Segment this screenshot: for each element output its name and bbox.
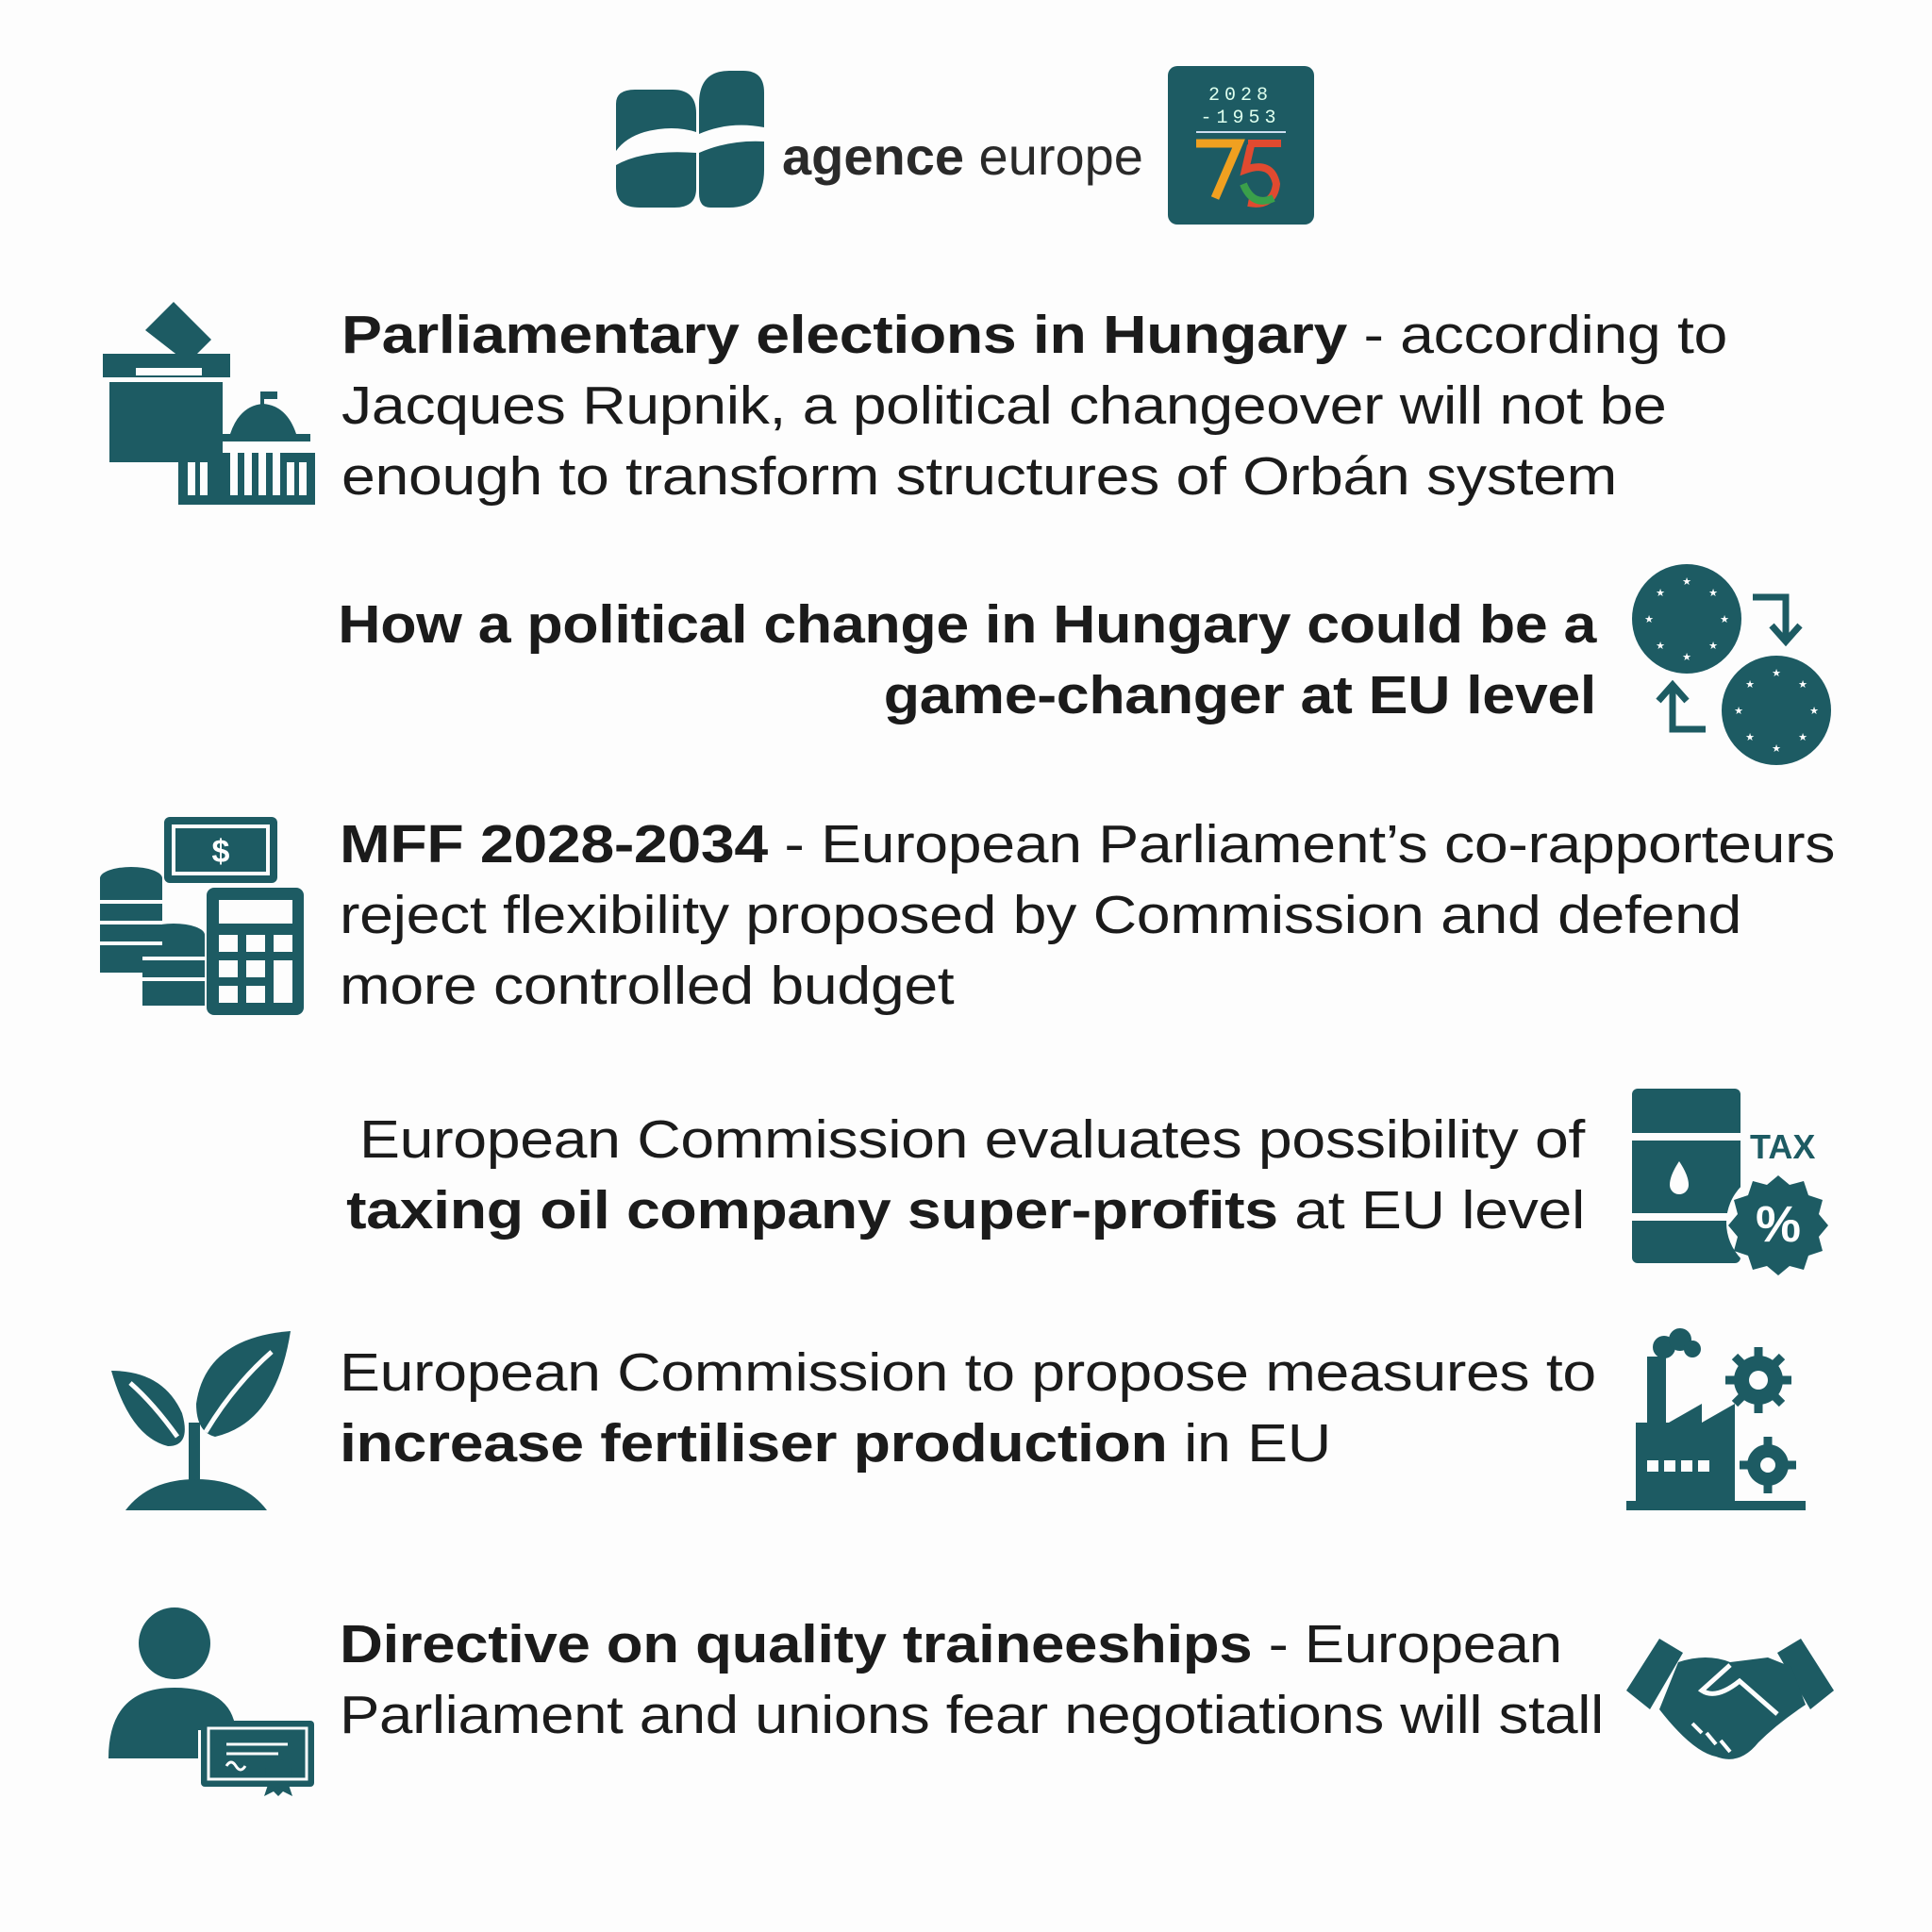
icon: EU flags exchange: ★ xyxy=(1708,587,1718,599)
icon: EU flags exchange: ★ xyxy=(1656,587,1665,599)
row 5 text: European Commission to propose measures to xyxy=(340,1342,1596,1403)
row 1 text xyxy=(341,305,1727,507)
wordmark: agence europe xyxy=(782,126,1143,186)
logo mark xyxy=(616,71,764,208)
icon: EU flags exchange: ★ xyxy=(1772,667,1781,679)
row 1 text: Jacques Rupnik, a political changeover will not be xyxy=(341,375,1666,436)
icon: oil barrel tax: TAX xyxy=(1750,1127,1815,1166)
row 4 text: taxing oil company super-profits at EU level xyxy=(346,1180,1585,1241)
icon: plant sprout xyxy=(111,1331,291,1510)
icon: ballot box and parliament xyxy=(103,302,315,505)
row 1 text: Parliamentary elections in Hungary - according to xyxy=(341,305,1727,365)
row 3 text: more controlled budget xyxy=(340,956,954,1016)
icon: EU flags exchange: ★ xyxy=(1682,651,1691,663)
icon: EU flags exchange: ★ xyxy=(1798,731,1807,743)
icon: EU flags exchange: ★ xyxy=(1720,613,1729,625)
row 4 text: European Commission evaluates possibility of xyxy=(359,1109,1585,1170)
icon: EU flags exchange: ★ xyxy=(1809,705,1819,717)
row 3 text xyxy=(340,814,1835,1016)
icon: handshake xyxy=(1626,1639,1834,1759)
row 3 text: reject flexibility proposed by Commission and defend xyxy=(340,885,1741,945)
badge 75 years: 2028 xyxy=(1208,85,1273,107)
icon: coins and calculator: $ xyxy=(212,834,230,870)
icon: oil barrel tax xyxy=(1632,1089,1828,1275)
row 2 text: How a political change in Hungary could be a xyxy=(338,594,1596,655)
row 6 text: Parliament and unions fear negotiations will stall xyxy=(340,1685,1604,1745)
icon: factory with gears xyxy=(1626,1328,1806,1510)
icon: EU flags exchange: ★ xyxy=(1745,678,1755,691)
badge 75 years: -1953 xyxy=(1200,108,1281,129)
icon: EU flags exchange: ★ xyxy=(1734,705,1743,717)
row 6 text: Directive on quality traineeships - European xyxy=(340,1614,1562,1674)
icon: EU flags exchange xyxy=(1632,564,1831,765)
row 2 text xyxy=(338,594,1597,725)
row 4 text xyxy=(346,1109,1585,1241)
icon: EU flags exchange: ★ xyxy=(1798,678,1807,691)
row 1 text: enough to transform structures of Orbán system xyxy=(341,446,1617,507)
row 3 text: MFF 2028-2034 - European Parliament’s co-rapporteurs xyxy=(340,814,1835,874)
badge 75 years xyxy=(1168,66,1314,225)
icon: EU flags exchange: ★ xyxy=(1656,640,1665,652)
row 6 text xyxy=(340,1614,1604,1745)
row 5 text: increase fertiliser production in EU xyxy=(340,1413,1331,1474)
icon: EU flags exchange: ★ xyxy=(1644,613,1654,625)
row 5 text xyxy=(340,1342,1596,1474)
row 2 text: game-changer at EU level xyxy=(884,665,1596,725)
logo: agence europe xyxy=(616,66,1314,225)
icon: EU flags exchange: ★ xyxy=(1745,731,1755,743)
icon: EU flags exchange: ★ xyxy=(1772,742,1781,755)
icon: coins and calculator xyxy=(100,817,304,1015)
icon: person with certificate xyxy=(108,1607,314,1796)
icon: EU flags exchange: ★ xyxy=(1708,640,1718,652)
icon: oil barrel tax: % xyxy=(1756,1196,1801,1253)
icon: EU flags exchange: ★ xyxy=(1682,575,1691,588)
